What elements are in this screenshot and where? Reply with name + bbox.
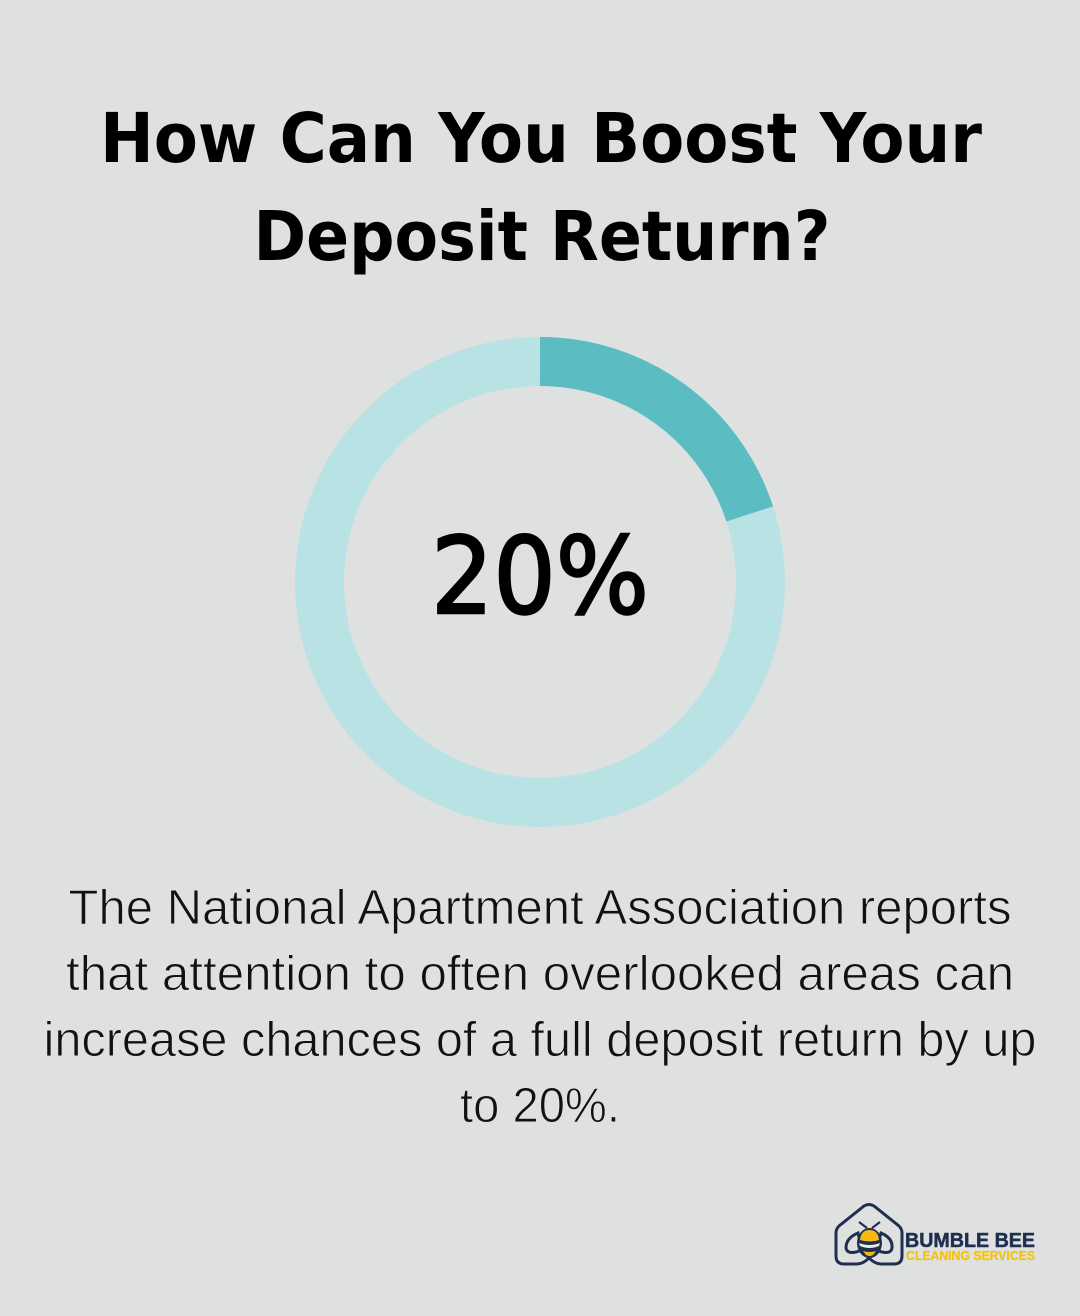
description text: that attention to often overlooked areas can xyxy=(66,947,1014,1001)
logo wordmark: CLEANING SERVICES xyxy=(906,1249,1035,1263)
logo wordmark: BUMBLE BEE xyxy=(905,1230,1035,1252)
donut chart: 20% xyxy=(320,362,760,802)
title xyxy=(100,99,982,277)
donut value: 20% xyxy=(431,515,649,638)
icon: bee xyxy=(846,1222,892,1258)
title: Deposit Return? xyxy=(254,197,830,277)
description text xyxy=(44,881,1036,1133)
logo: Bumble Bee Cleaning Services xyxy=(836,1204,1035,1264)
description text: The National Apartment Association reports xyxy=(68,881,1011,935)
logo wordmark xyxy=(905,1230,1035,1263)
description text: increase chances of a full deposit return by up xyxy=(44,1013,1036,1067)
description text: to 20%. xyxy=(460,1079,620,1133)
icon: house outline xyxy=(836,1204,902,1264)
title: How Can You Boost Your xyxy=(100,99,982,179)
